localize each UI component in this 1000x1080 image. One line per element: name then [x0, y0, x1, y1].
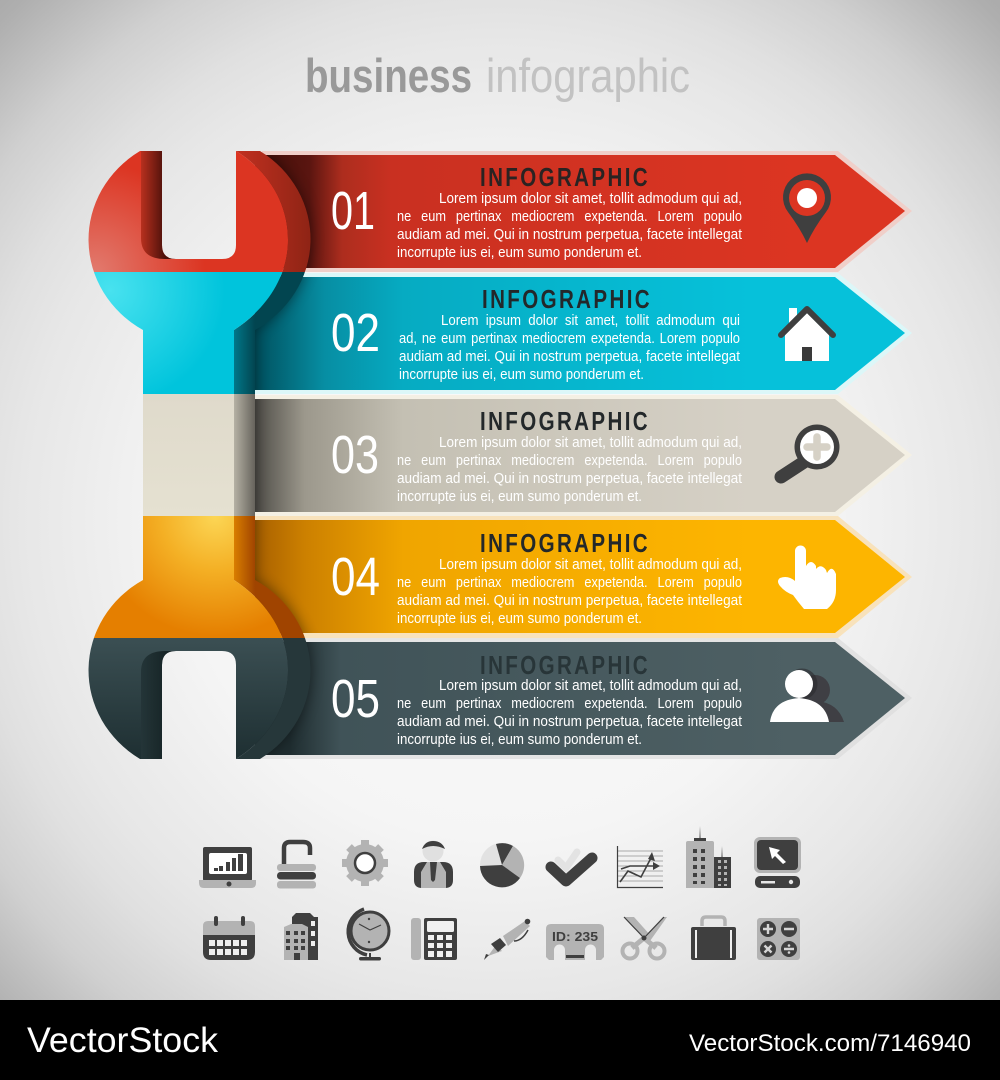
icon row 2 — [203, 909, 800, 960]
body text 2: audiam ad mei. Qui in nostrum perpetua, facete intellegat — [399, 348, 741, 365]
body text 3: incorrupte ius ei, eum sumo ponderum et. — [397, 488, 642, 505]
heading 1: INFOGRAPHIC — [480, 162, 650, 192]
panel 1: red arrow — [255, 155, 905, 268]
body text 5: Lorem ipsum dolor sit amet, tollit admodum qui ad, — [439, 677, 742, 694]
body text 1: Lorem ipsum dolor sit amet, tollit admodum qui ad, — [439, 190, 742, 207]
icon: people — [770, 668, 844, 722]
icon: briefcase — [691, 917, 736, 960]
icon: office buildings — [284, 913, 318, 960]
body text 5: ne eum pertinax mediocrem expetenda. Lorem populo — [397, 695, 742, 712]
body text 5: incorrupte ius ei, eum sumo ponderum et. — [397, 731, 642, 748]
heading 3: INFOGRAPHIC — [480, 406, 650, 436]
body text 5: audiam ad mei. Qui in nostrum perpetua, facete intellegat — [397, 713, 743, 730]
panel halos — [255, 151, 912, 759]
icon: map pin — [783, 173, 831, 243]
body text 3 — [397, 434, 743, 505]
body text 1: audiam ad mei. Qui in nostrum perpetua, facete intellegat — [397, 226, 743, 243]
wrench — [85, 151, 315, 759]
icon: check mark — [551, 852, 592, 881]
number 03: 03 — [331, 425, 379, 485]
body text 4: Lorem ipsum dolor sit amet, tollit admodum qui ad, — [439, 556, 742, 573]
body text 4 — [397, 556, 743, 627]
icon: scissors — [622, 917, 667, 958]
body text 3: ne eum pertinax mediocrem expetenda. Lorem populo — [397, 452, 742, 469]
number 05: 05 — [331, 669, 380, 729]
icon: city buildings — [686, 826, 731, 888]
footer logo: VectorStock — [27, 1021, 219, 1060]
number 04: 04 — [331, 547, 380, 607]
body text 4: audiam ad mei. Qui in nostrum perpetua, facete intellegat — [397, 592, 743, 609]
icon row 1 — [199, 826, 801, 888]
icon: laptop — [199, 847, 256, 888]
number 02: 02 — [331, 303, 380, 363]
body text 4: incorrupte ius ei, eum sumo ponderum et. — [397, 610, 642, 627]
icon: house — [781, 308, 833, 361]
wrench upper jaw inner wall — [141, 151, 176, 259]
number 01: 01 — [331, 181, 375, 241]
wrench lower jaw inner wall — [141, 651, 176, 759]
body text 2 — [399, 312, 741, 383]
body text 3: audiam ad mei. Qui in nostrum perpetua, facete intellegat — [397, 470, 743, 487]
icon: pen — [484, 919, 530, 960]
heading 2: INFOGRAPHIC — [482, 284, 652, 314]
icon: pointing hand — [778, 546, 836, 609]
footer bar — [0, 1000, 1000, 1080]
body text 2: Lorem ipsum dolor sit amet, tollit admodum qui — [441, 312, 740, 329]
icon: computer — [754, 837, 801, 888]
icon: open lock — [277, 842, 316, 888]
panel 4: orange arrow — [255, 520, 905, 633]
icon: calculator buttons — [757, 918, 800, 960]
body text 1 — [397, 190, 743, 261]
icon: pie chart — [480, 843, 524, 887]
body text 5 — [397, 677, 743, 748]
wrench front face bands — [85, 151, 290, 759]
body text 3: Lorem ipsum dolor sit amet, tollit admodum qui ad, — [439, 434, 742, 451]
body text 2: ad, ne eum pertinax mediocrem expetenda. Lorem populo — [399, 330, 740, 347]
body text 1: ne eum pertinax mediocrem expetenda. Lorem populo — [397, 208, 742, 225]
icon: ID card — [546, 924, 604, 960]
body text 2: incorrupte ius ei, eum sumo ponderum et. — [399, 366, 644, 383]
panel 5: dark arrow — [255, 642, 905, 755]
icon: businessman — [414, 840, 453, 888]
icon: line chart — [618, 846, 663, 888]
icon: ID card: ID: 235 — [552, 929, 598, 944]
icon: gear — [342, 840, 388, 886]
icon: calendar — [203, 916, 255, 960]
title — [305, 49, 690, 102]
icon: magnifier — [781, 424, 840, 477]
heading 4: INFOGRAPHIC — [480, 528, 650, 558]
body text 1: incorrupte ius ei, eum sumo ponderum et. — [397, 244, 642, 261]
wrench side faces — [230, 151, 315, 759]
icon: globe clock — [348, 909, 389, 960]
panel 3: beige arrow — [255, 399, 905, 512]
body text 4: ne eum pertinax mediocrem expetenda. Lorem populo — [397, 574, 742, 591]
wrench cast shadow — [255, 155, 317, 755]
icon: calculator with bar — [411, 918, 457, 960]
title: infographic — [486, 49, 690, 102]
heading 5: INFOGRAPHIC — [480, 650, 650, 680]
footer URL: VectorStock.com/7146940 — [689, 1030, 971, 1057]
panel 2: cyan arrow — [255, 277, 905, 390]
title: business — [305, 49, 472, 102]
